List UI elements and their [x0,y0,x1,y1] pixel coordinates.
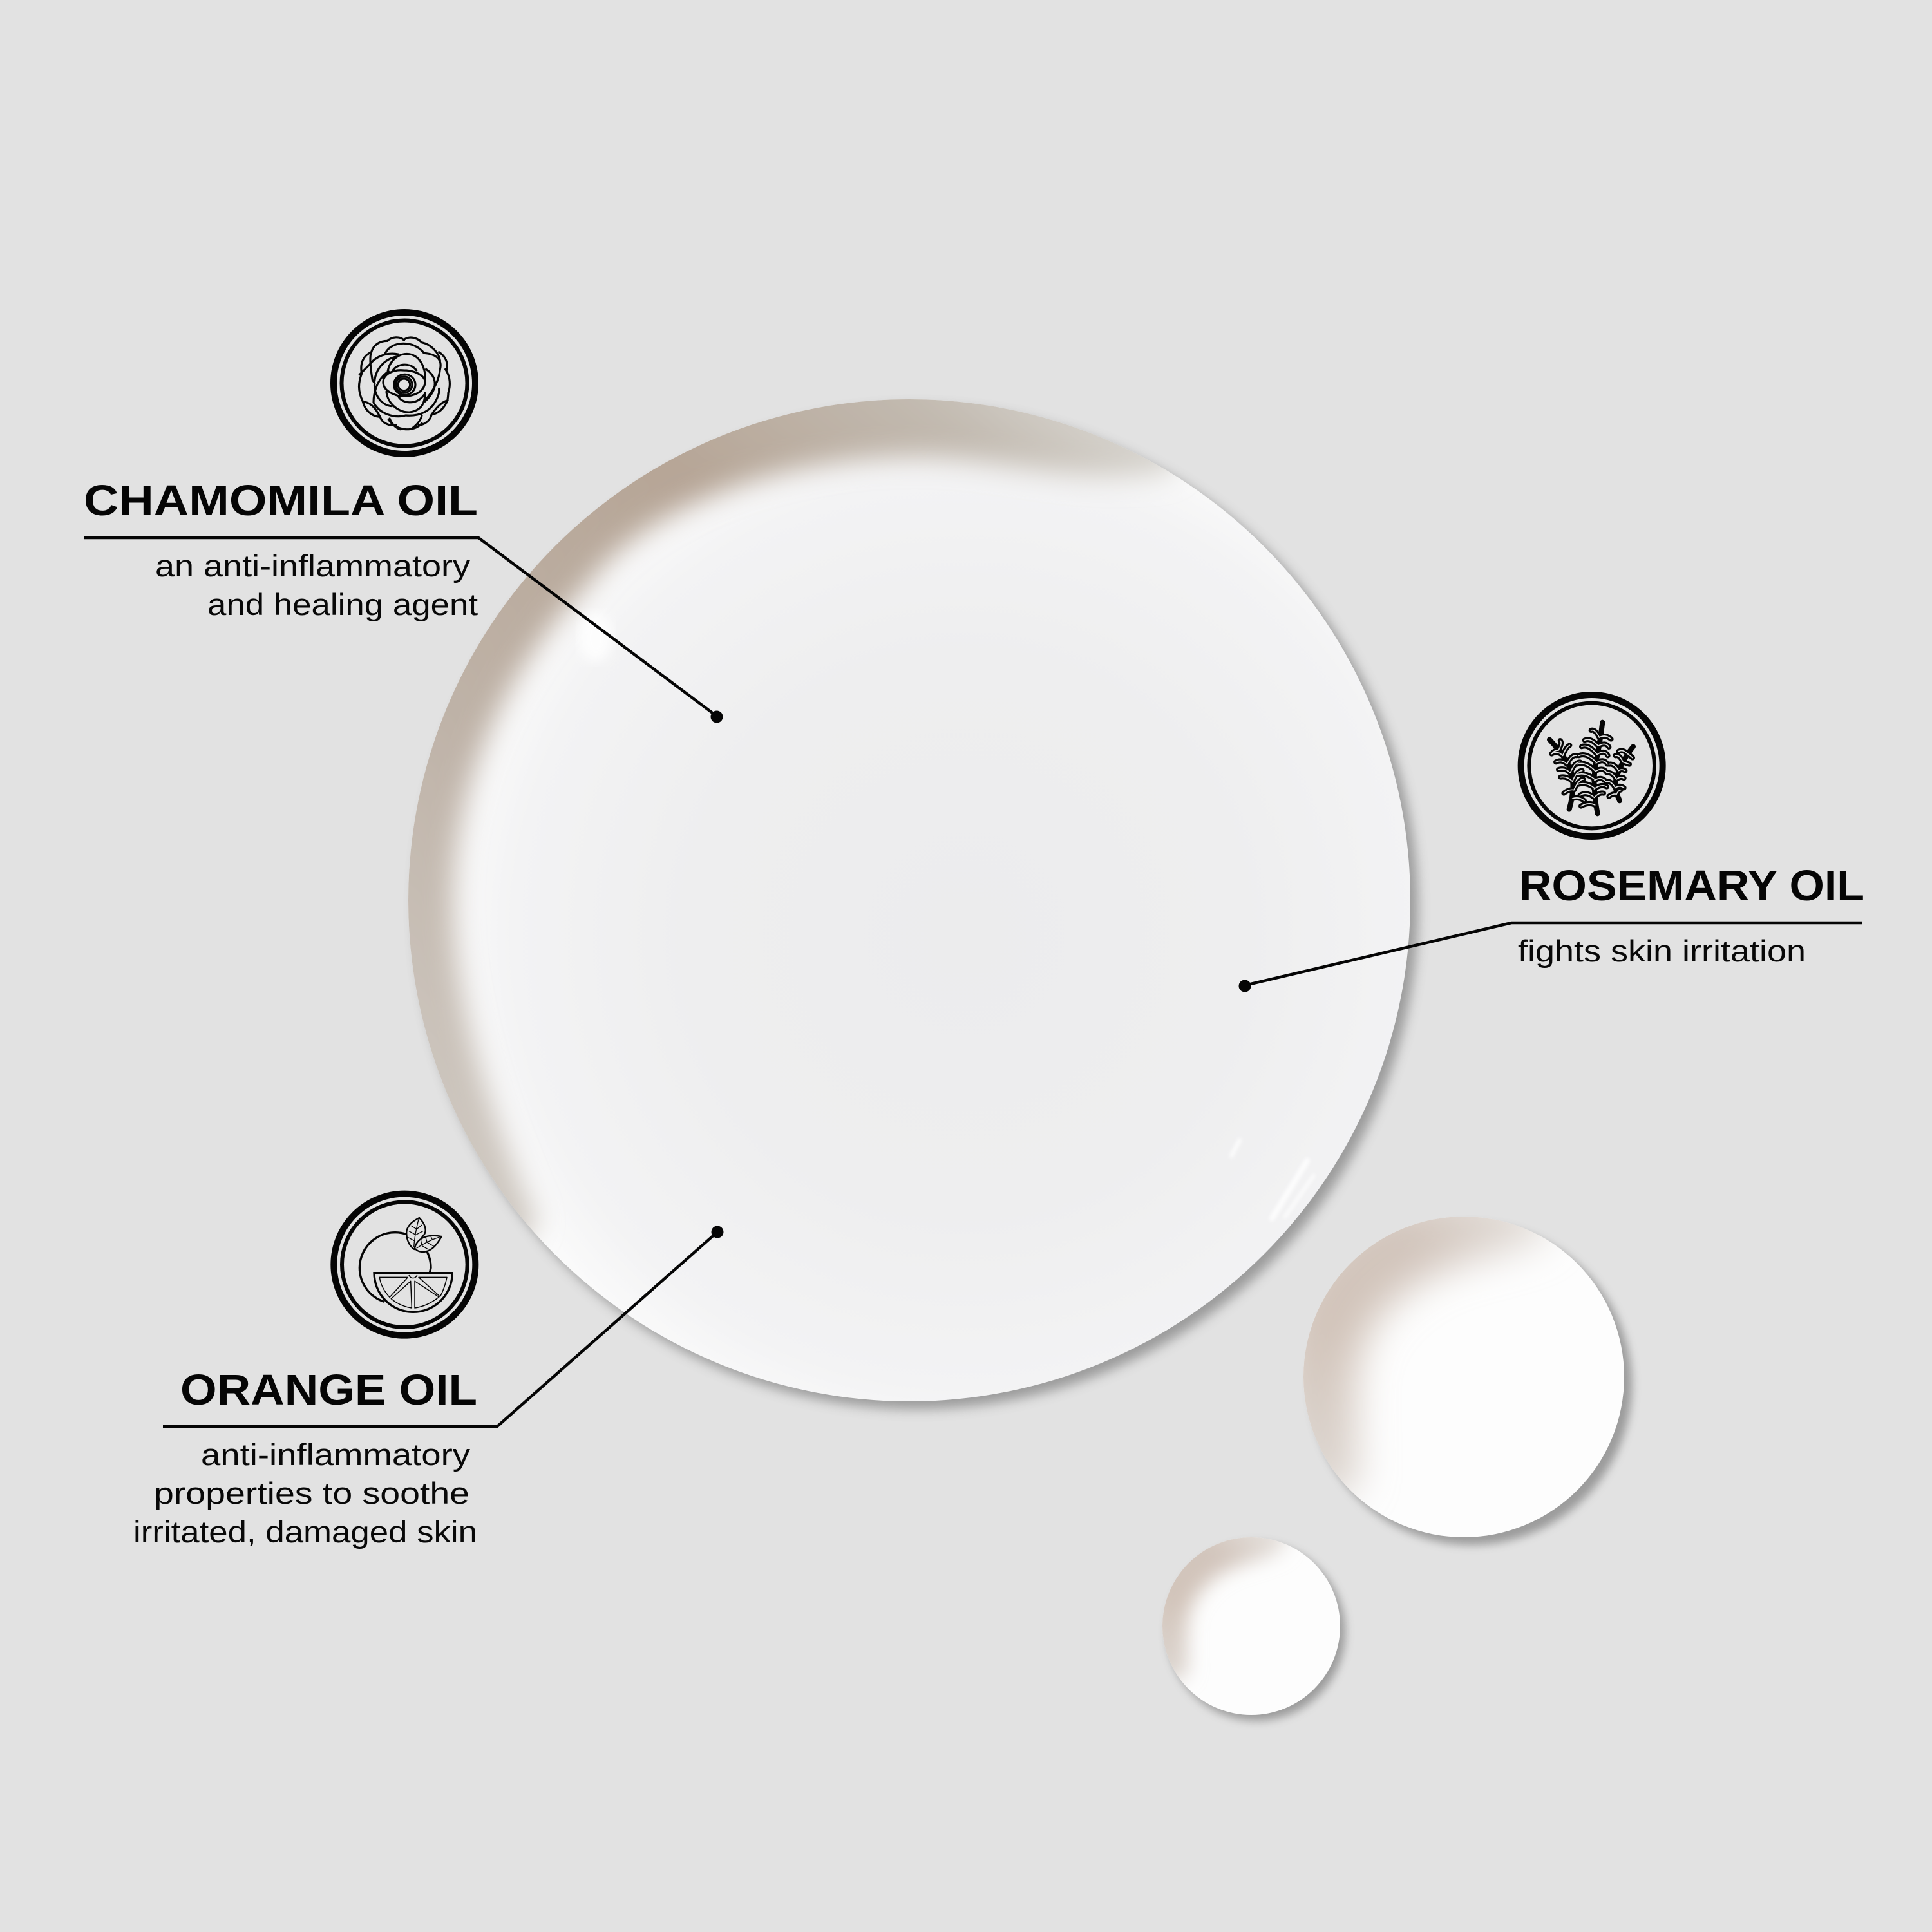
medium oil drop [1303,1217,1637,1550]
large oil drop [354,345,1423,1417]
description: orange oil: anti-inflammatory [201,1437,471,1472]
description: orange oil: properties to soothe [154,1476,469,1510]
description: rosemary oil: fights skin irritation [1518,934,1806,968]
small oil drop [1162,1537,1350,1726]
callout: chamomila oil [84,312,723,723]
icon: chamomile flower [334,312,475,454]
heading: orange oil: ORANGE OIL [180,1366,477,1414]
icon: orange with slice and leaves [334,1194,475,1336]
heading: chamomila oil: CHAMOMILA OIL [84,477,478,525]
callout: rosemary oil [1239,695,1864,992]
description: chamomila oil: and healing agent [207,587,478,621]
description: orange oil: irritated, damaged skin [133,1515,477,1549]
description: chamomila oil: an anti-inflammatory [155,549,471,583]
icon: rosemary sprigs [1521,695,1663,837]
description: chamomila oil [155,549,478,621]
description: orange oil [133,1437,477,1549]
leader line: orange [163,1226,724,1426]
callout: orange oil [133,1194,724,1549]
heading: rosemary oil: ROSEMARY OIL [1519,862,1864,910]
leader line: rosemary [1239,923,1862,992]
leader line: chamomila [84,538,723,723]
